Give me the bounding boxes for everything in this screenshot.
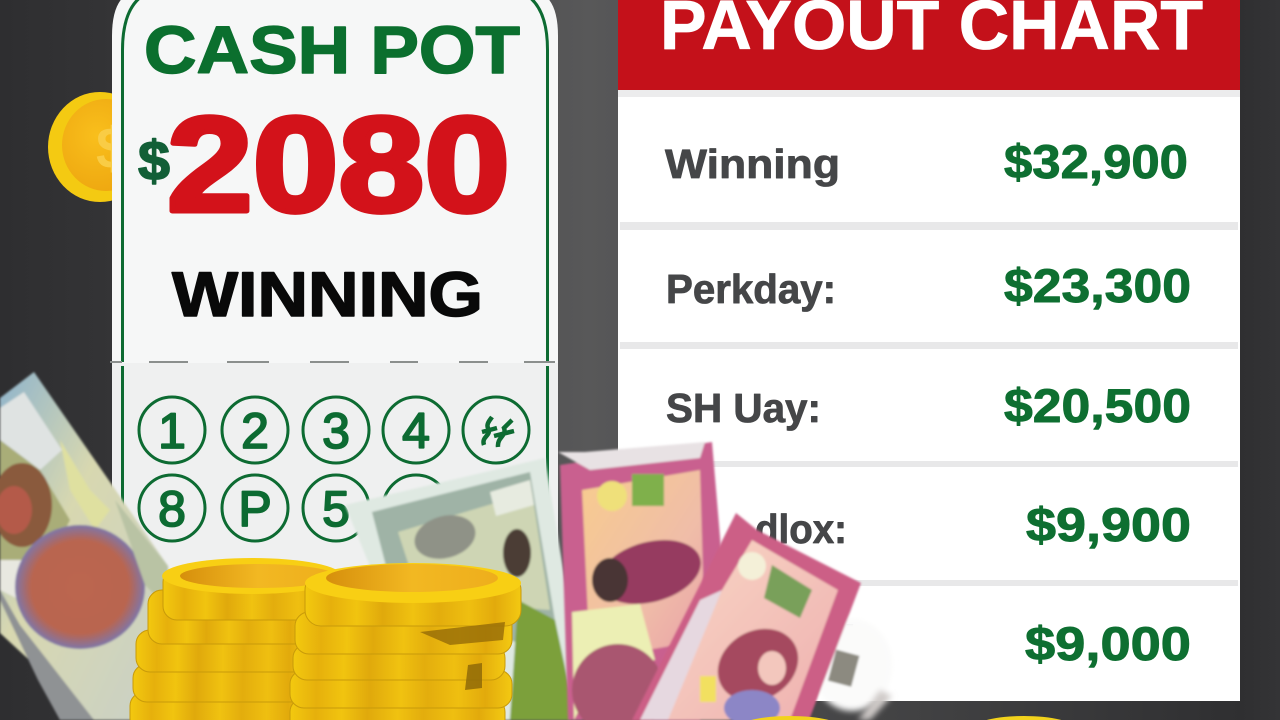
right coin stack [290,563,521,720]
panel: lottery ticket: P [238,481,272,537]
row labels: Winning [665,141,840,187]
icon: gold coin behind ticket [48,92,152,202]
row labels: : [843,608,857,654]
row values: $9,900 [1026,498,1191,551]
panel: lottery ticket: 3 [322,403,350,459]
number grid [139,397,529,541]
illustration: coins at bottom edge [738,716,1074,720]
illustration: gold coin stacks [130,558,521,720]
dollar sign: $ [138,129,170,192]
icon: gold coin behind ticket: $ [96,116,128,181]
illustration: left banknote [0,372,172,720]
row labels: dlox: [755,506,847,552]
illustration: pink banknote [558,442,722,720]
left coin stack [130,558,342,720]
row labels [665,141,857,654]
winning label: WINNING [172,260,483,330]
row values [1004,135,1191,670]
row labels: Perkday: [666,266,836,312]
row values: $9,000 [1025,617,1191,670]
row values: $23,300 [1004,259,1191,312]
illustration: green banknote [345,458,578,720]
header band [618,0,1240,90]
illustration: tilted pink banknote [632,513,892,720]
panel: lottery ticket: 1 [158,403,186,459]
panel: lottery ticket: 2 [241,403,269,459]
panel: lottery ticket: 8 [158,481,186,537]
row values: $32,900 [1004,135,1188,188]
heading: cash pot: CASH POT [144,13,520,88]
row values: $20,500 [1004,379,1191,432]
row labels: SH Uay: [666,385,821,431]
panel: lottery ticket: 5 [322,481,350,537]
panel: payout chart [618,0,1240,701]
panel: lottery ticket: 4 [402,403,430,459]
jackpot amount: 2080 [167,89,510,240]
panel: lottery ticket [110,0,558,603]
